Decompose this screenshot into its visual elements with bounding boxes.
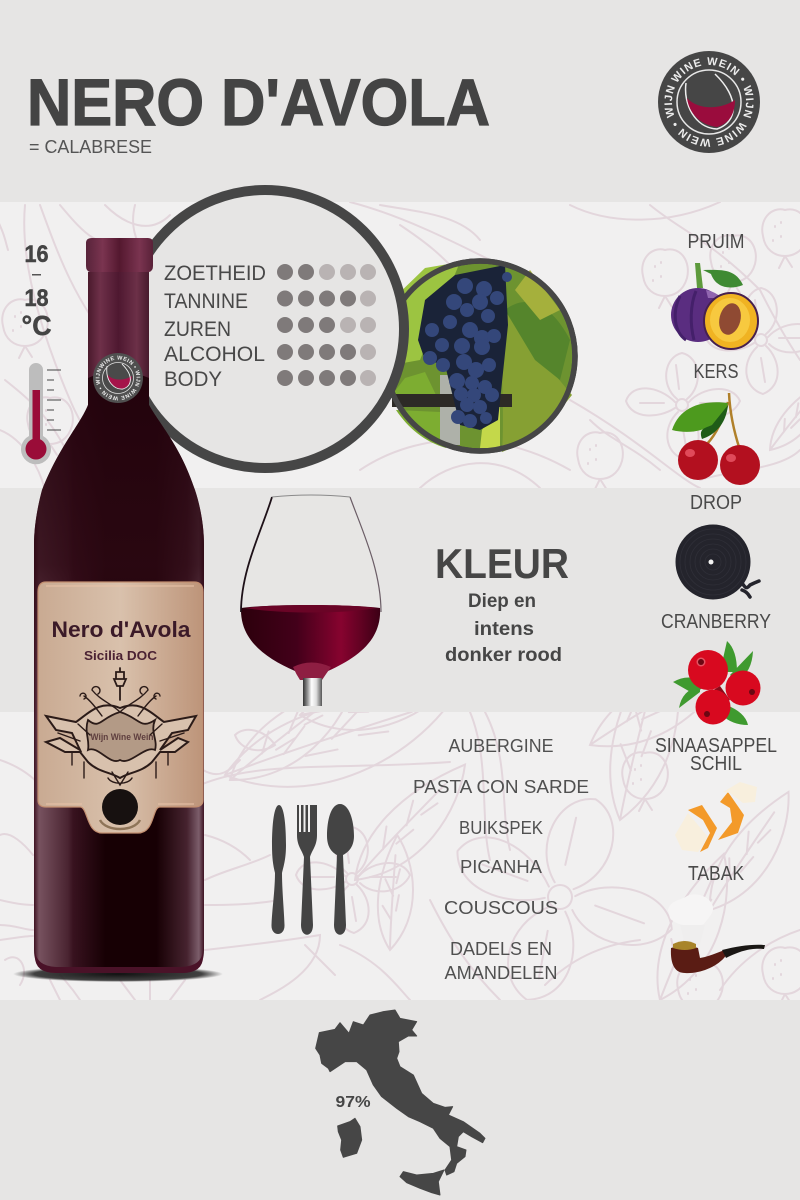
aroma labels: CRANBERRY [661, 611, 771, 633]
pairing list: DADELS EN [450, 938, 552, 959]
pairing list [413, 735, 589, 983]
pairing list: AUBERGINE [448, 735, 554, 756]
serving temperature: 16 [24, 241, 48, 268]
color description: Diep en [468, 591, 536, 612]
bottle neck [88, 272, 149, 378]
title: NERO D'AVOLA [27, 65, 490, 139]
serving temperature [22, 241, 52, 341]
tannine row [164, 290, 376, 313]
zoetheid row [164, 262, 376, 285]
aroma labels: PRUIM [688, 231, 744, 253]
pairing list: AMANDELEN [444, 962, 558, 983]
bottle capsule [86, 238, 153, 272]
icon: licorice [676, 524, 759, 600]
aroma labels: SINAASAPPEL [655, 735, 777, 757]
icon: thermometer [21, 363, 61, 464]
label text: name: Nero d'Avola [52, 617, 191, 642]
zuren row [164, 317, 376, 341]
body row [164, 368, 376, 391]
label ornament [46, 668, 196, 785]
color description: intens [474, 619, 534, 640]
icon: plum [671, 263, 758, 349]
icon: cherries [672, 393, 760, 485]
body row: BODY [164, 368, 222, 391]
map: Italy [316, 1010, 485, 1195]
subtitle: = CALABRESE [29, 136, 152, 157]
bottle shadow [13, 966, 223, 982]
label text: brand: Wijn Wine Wein [90, 732, 154, 742]
zuren row: ZUREN [164, 318, 231, 341]
icon: pipe [668, 894, 765, 973]
panel: lower patterned band [0, 629, 800, 1038]
pairing list: BUIKSPEK [459, 817, 544, 838]
icon: orange peel [675, 782, 757, 852]
wine glass [241, 495, 381, 706]
serving temperature: 18 [24, 285, 48, 312]
color description [445, 591, 562, 666]
tannine row: TANNINE [164, 290, 248, 313]
aroma labels: SCHIL [690, 753, 742, 775]
alcohol row [164, 343, 376, 366]
color description: donker rood [445, 645, 562, 666]
serving temperature: °C [22, 310, 52, 341]
production share: 97% [336, 1094, 370, 1111]
alcohol row: ALCOHOL [164, 343, 265, 366]
panel: upper patterned band [0, 202, 800, 491]
neck logo: WINE WEIN • WIJN WINE WEIN • WIJN [96, 356, 140, 400]
aroma labels [655, 231, 777, 885]
pairing list: PASTA CON SARDE [413, 776, 589, 797]
seal [102, 789, 138, 825]
panel: grape photo [385, 261, 575, 452]
bottle [14, 238, 222, 982]
label text: appellation: Sicilia DOC [84, 648, 158, 663]
pairing list: COUSCOUS [444, 897, 558, 918]
aroma labels: DROP [690, 492, 742, 514]
aroma labels: KERS [694, 361, 738, 383]
wine label [38, 582, 203, 833]
panel: taste profile circle [126, 190, 404, 468]
bottle body [34, 272, 204, 973]
pairing list: PICANHA [460, 856, 543, 877]
logo: WINE WEIN • WIJN WINE WEIN • WIJN [664, 57, 754, 147]
icon: cutlery [271, 804, 354, 935]
aroma labels: TABAK [688, 863, 745, 885]
icon: cranberries [673, 641, 760, 725]
color heading: KLEUR [435, 540, 569, 587]
zoetheid row: ZOETHEID [164, 262, 266, 285]
